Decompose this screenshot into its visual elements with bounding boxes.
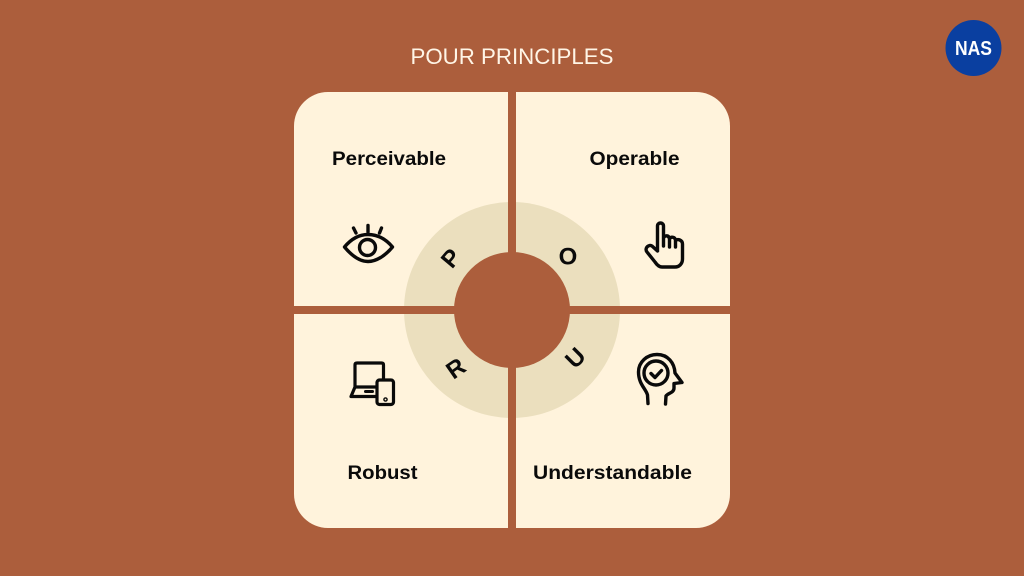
letter P: P	[436, 244, 467, 274]
letter U: U	[560, 343, 591, 374]
heading: Understandable: Understandable	[533, 463, 692, 484]
title: POUR PRINCIPLES	[410, 44, 614, 69]
horizontal gap	[294, 306, 730, 314]
POUR quadrant diagram	[294, 92, 730, 528]
logo: NAS badge	[946, 20, 1002, 76]
icon: head with checkmark	[638, 354, 682, 404]
ring	[404, 202, 620, 418]
center circle	[454, 252, 570, 368]
heading: Operable: Operable	[590, 149, 680, 170]
letter R: R	[441, 353, 471, 385]
icon: eye	[344, 226, 392, 262]
heading: Robust: Robust	[348, 463, 418, 484]
panel: cream rounded square	[294, 92, 730, 528]
letter O: O	[559, 244, 577, 271]
icon: laptop and phone	[351, 363, 394, 404]
heading: Perceivable: Perceivable	[332, 149, 446, 170]
logo: NAS badge: NAS	[955, 38, 992, 60]
vertical gap	[508, 92, 516, 528]
icon: pointing hand	[646, 223, 682, 267]
